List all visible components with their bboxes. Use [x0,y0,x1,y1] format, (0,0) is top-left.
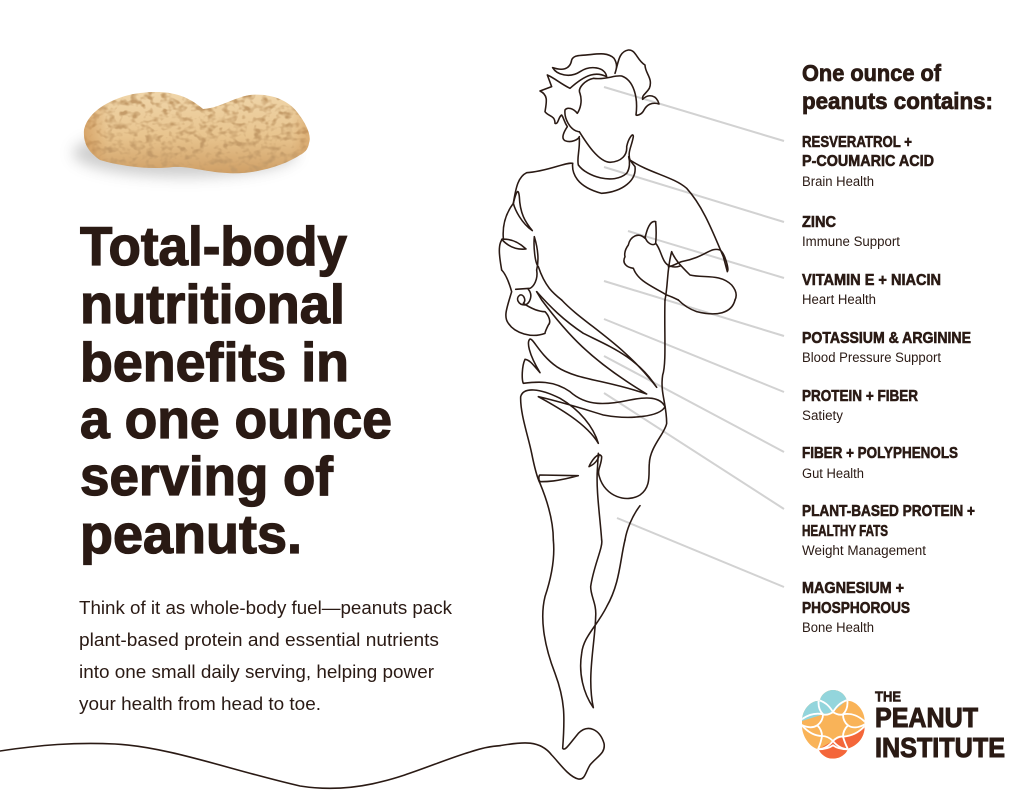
logo wordmark [875,688,1005,763]
logo wordmark: PEANUT [875,702,978,733]
list heading: One ounce of [802,60,941,86]
nutrient: weight management [802,503,975,558]
title: Total-body [80,215,347,277]
nutrient: weight management: HEALTHY FATS [802,523,888,540]
nutrient: bone health: PHOSPHOROUS [802,600,910,617]
leader lines [604,87,784,587]
nutrient: immune support [802,214,900,249]
body paragraph [79,598,453,714]
nutrient: heart health [802,272,941,307]
nutrient: satiety: PROTEIN + FIBER [802,388,918,405]
list heading [802,60,993,114]
peanut photo [73,88,315,178]
nutrient: satiety: Satiety [802,408,843,423]
upper body [499,50,736,300]
nutrient: brain health: RESVERATROL + [802,134,912,151]
title: peanuts. [80,503,302,565]
nutrient: weight management: PLANT-BASED PROTEIN + [802,503,975,520]
nutrient: satiety [802,388,918,423]
nutrient: heart health: VITAMIN E + NIACIN [802,272,941,289]
title [80,215,392,565]
nutrient: blood pressure: POTASSIUM & ARGININE [802,330,971,347]
nutrient: bone health [802,580,910,635]
lower legs and foot [500,540,625,779]
nutrient: gut health [802,445,958,481]
torso, shorts and thigh [521,292,735,540]
nutrient: blood pressure [802,330,971,365]
nutrient: immune support: Immune Support [802,234,900,249]
nutrient: bone health: MAGNESIUM + [802,580,904,597]
nutrient: gut health: FIBER + POLYPHENOLS [802,445,958,462]
nutrient: gut health: Gut Health [802,466,864,481]
body paragraph: Think of it as whole-body fuel—peanuts pack [79,598,453,618]
nutrient: weight management: Weight Management [802,543,926,558]
nutrient: bone health: Bone Health [802,620,874,635]
body paragraph: your health from head to toe. [79,694,321,714]
logo wordmark: THE [875,688,901,706]
nutrient: blood pressure: Blood Pressure Support [802,350,941,365]
body paragraph: into one small daily serving, helping power [79,662,434,682]
nutrient: brain health: Brain Health [802,174,874,189]
nutrient: immune support: ZINC [802,214,836,231]
body paragraph: plant-based protein and essential nutrients [79,630,439,650]
runner line drawing [499,50,736,779]
title: benefits in [80,331,349,393]
logo mark [802,690,865,759]
title: nutritional [80,273,345,335]
list heading: peanuts contains: [802,88,993,114]
nutrient: brain health: P-COUMARIC ACID [802,153,934,170]
ground wave line [0,743,500,788]
nutrient: heart health: Heart Health [802,292,876,307]
logo wordmark: INSTITUTE [875,732,1005,763]
logo [802,690,1004,759]
nutrient: brain health [802,134,934,189]
title: a one ounce [80,388,392,450]
title: serving of [80,445,334,507]
left hand [502,270,550,335]
